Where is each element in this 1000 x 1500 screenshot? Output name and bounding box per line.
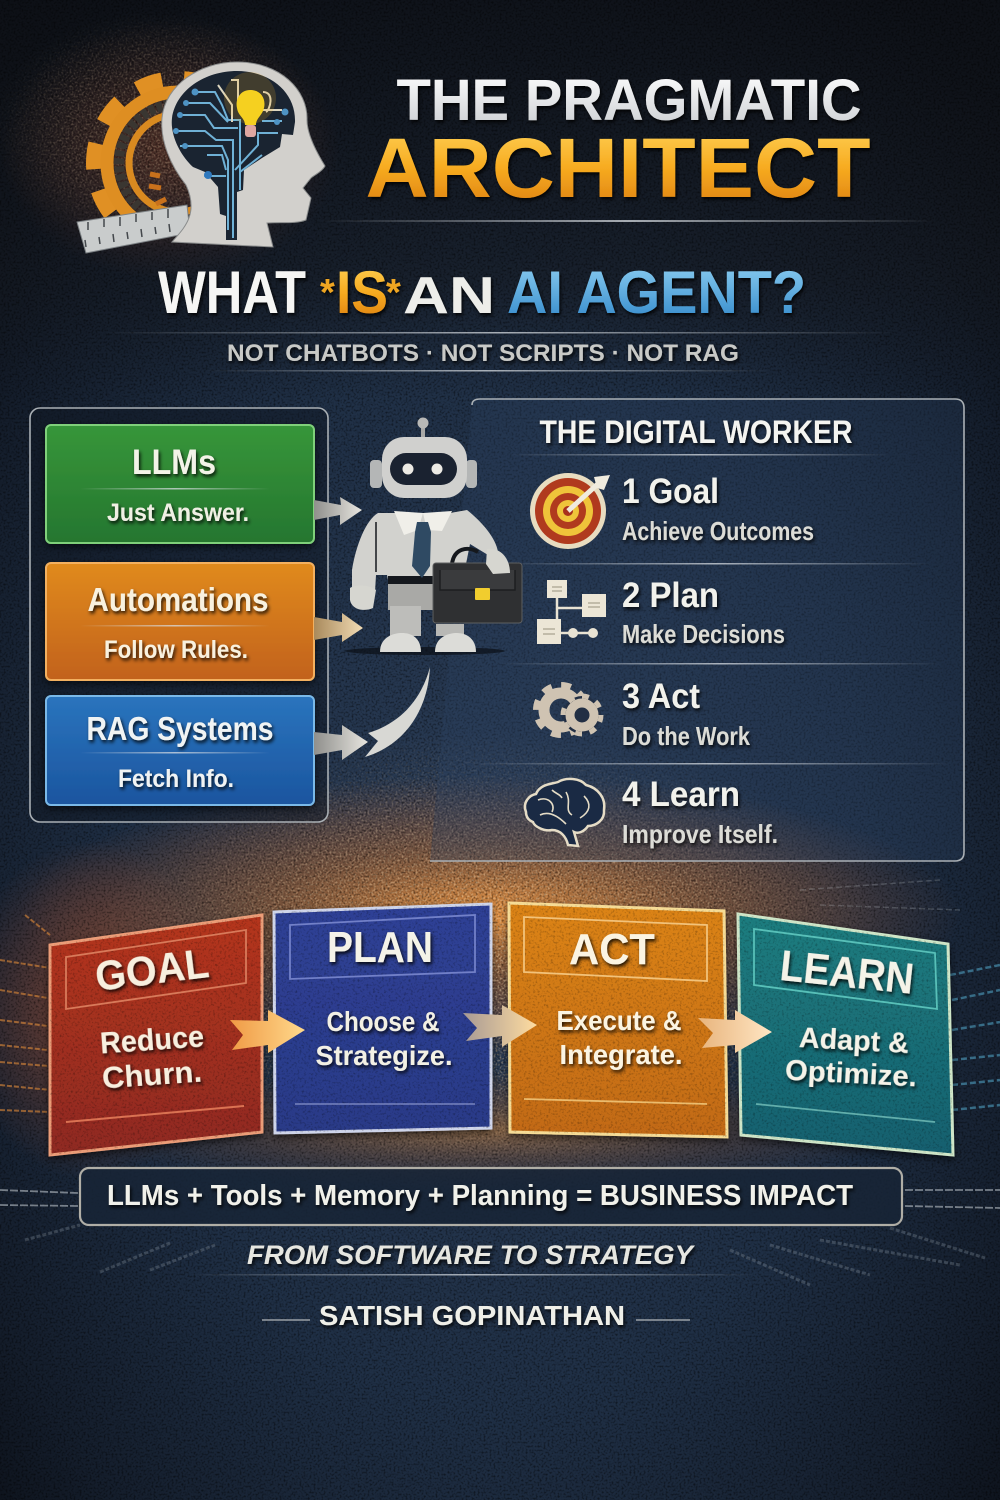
collar and tie	[394, 511, 423, 535]
flow card: learn: Optimize.	[784, 1055, 918, 1093]
title	[366, 68, 870, 215]
head	[370, 460, 382, 488]
circuit traces	[176, 92, 240, 238]
flow card: goal: Churn.	[101, 1054, 203, 1095]
step: act: Do the Work	[622, 721, 750, 751]
step: act: 3 Act	[622, 677, 700, 716]
step: plan: 2 Plan	[622, 576, 719, 615]
flow card: learn: LEARN	[778, 941, 916, 1004]
icon: head with circuit brain	[162, 62, 325, 247]
step: learn: 4 Learn	[622, 775, 740, 814]
flow card: act: Execute &	[556, 1005, 682, 1036]
arrow: LLMs to robot	[314, 497, 362, 525]
step: plan: Make Decisions	[622, 619, 785, 649]
card: RAG Systems	[46, 696, 314, 805]
heading: what is an AI agent: AI AGENT?	[507, 259, 806, 326]
flow card: goal	[50, 915, 262, 1155]
icon: target	[530, 473, 610, 549]
flow card: plan: PLAN	[327, 923, 433, 972]
step: plan	[622, 576, 785, 649]
panel: what it is not	[30, 408, 328, 822]
heading: what is an AI agent: *	[386, 272, 401, 314]
arrow: automations to robot	[314, 613, 363, 642]
antenna	[421, 428, 425, 440]
heading: what is an AI agent: *	[320, 272, 335, 314]
arrow: plan to act	[463, 1005, 537, 1047]
heading: what is an AI agent	[158, 259, 806, 326]
equation bar	[80, 1168, 902, 1225]
robot illustration	[345, 418, 522, 655]
flow card: act	[509, 903, 727, 1137]
icon: gears	[536, 685, 601, 735]
subtitle: NOT CHATBOTS · NOT SCRIPTS · NOT RAG	[227, 340, 739, 367]
logo: gear, head, ruler	[77, 62, 325, 263]
icon: orange gear	[86, 71, 194, 218]
equation bar: LLMs + Tools + Memory + Planning = BUSINESS IMPACT	[107, 1180, 853, 1212]
arrow: goal to plan	[230, 1010, 305, 1053]
icon: ruler	[77, 205, 190, 253]
card: LLMs: LLMs	[132, 443, 216, 482]
heading: what is an AI agent: IS	[336, 259, 388, 326]
heading: what is an AI agent: AN	[403, 267, 495, 325]
author: SATISH GOPINATHAN	[319, 1300, 625, 1331]
torso and arms	[352, 510, 498, 592]
legs	[390, 606, 421, 636]
flow card: learn: Adapt &	[798, 1022, 910, 1060]
light streaks	[0, 915, 50, 1112]
arrow: act to learn	[698, 1010, 772, 1053]
title: THE PRAGMATIC	[396, 68, 862, 133]
step: goal: Achieve Outcomes	[622, 516, 814, 546]
flow card: act: Integrate.	[560, 1039, 682, 1070]
step: act	[622, 677, 750, 751]
card: RAG Systems: Fetch Info.	[118, 765, 234, 793]
card: RAG Systems: RAG Systems	[86, 710, 274, 747]
step: goal: 1 Goal	[622, 472, 719, 511]
flow card: act: ACT	[569, 925, 655, 974]
flow card: goal: Reduce	[99, 1018, 205, 1061]
icon: brain	[525, 779, 604, 846]
icon: flowchart	[537, 580, 606, 644]
light bulb	[224, 72, 276, 124]
flow card: plan: Strategize.	[316, 1040, 452, 1071]
card: Automations: Follow Rules.	[104, 636, 248, 664]
arrow: RAG to robot	[314, 725, 368, 760]
card: Automations	[46, 563, 314, 680]
flow card: learn	[738, 914, 953, 1155]
heading: THE DIGITAL WORKER	[540, 414, 852, 450]
tagline: FROM SOFTWARE TO STRATEGY	[247, 1240, 696, 1270]
flow card: goal: GOAL	[93, 939, 211, 1000]
flow card: plan	[274, 904, 491, 1133]
briefcase	[452, 549, 478, 564]
panel: the digital worker	[430, 399, 964, 861]
card: LLMs: Just Answer.	[107, 499, 249, 527]
card: LLMs	[46, 425, 314, 543]
card: Automations: Automations	[88, 581, 268, 618]
step: goal	[622, 472, 814, 546]
step: learn	[622, 775, 778, 849]
flow card: plan: Choose &	[326, 1006, 440, 1037]
step: learn: Improve Itself.	[622, 819, 778, 849]
title: ARCHITECT	[366, 121, 870, 215]
arrow: curved swoosh	[365, 667, 430, 757]
heading: what is an AI agent: WHAT	[158, 259, 306, 326]
